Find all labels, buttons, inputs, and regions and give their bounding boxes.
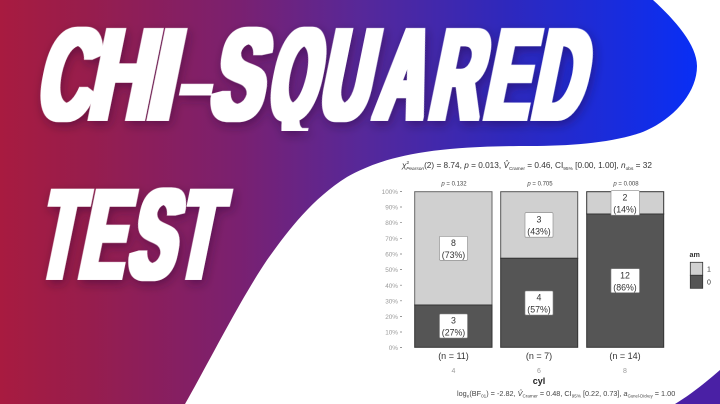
- title: CHI-SQUARED: H: [80, 2, 171, 147]
- stacked bar chart: [382, 182, 664, 386]
- data labels: (57%): [527, 304, 551, 314]
- title: CHI-SQUARED: A: [367, 2, 445, 147]
- y axis labels: 70%: [385, 236, 398, 243]
- chart caption: ) = -2.82,: [486, 389, 518, 398]
- data labels: (86%): [613, 282, 637, 292]
- y axis labels: 10%: [385, 330, 398, 336]
- y axis labels: 80%: [385, 220, 398, 227]
- chart subtitle statistics: obs: [626, 166, 634, 172]
- x axis title: cyl: [533, 376, 545, 386]
- title: CHI-SQUARED: E: [477, 2, 550, 147]
- chart caption: log: [457, 389, 467, 398]
- p values: p = 0.132: [440, 182, 467, 188]
- y axis labels: 0%: [389, 345, 398, 352]
- chart caption: Cramer: [523, 394, 538, 398]
- chart subtitle statistics: p = 0.013, V̂: [464, 161, 509, 170]
- chart subtitle statistics: Cramer: [509, 166, 525, 172]
- y axis labels: [382, 189, 398, 352]
- chart subtitle statistics: = 32: [633, 161, 652, 170]
- legend title: am: [690, 250, 700, 259]
- y axis ticks: [400, 192, 402, 348]
- bar: cyl 6: [501, 192, 578, 347]
- chart caption: 01: [481, 394, 487, 398]
- y axis labels: 100%: [382, 189, 398, 196]
- chart subtitle statistics: Pearson: [406, 166, 424, 172]
- title: TEST: E: [72, 163, 145, 305]
- chart subtitle statistics: 2: [407, 160, 410, 166]
- y axis labels: 20%: [385, 314, 398, 321]
- y axis labels: 50%: [385, 267, 398, 274]
- data labels: 3: [451, 316, 456, 326]
- chart caption: 95%: [572, 394, 581, 398]
- bar: cyl 4: [415, 192, 492, 347]
- sample sizes: (n = 14): [609, 351, 641, 361]
- title: CHI-SQUARED: [37, 26, 601, 140]
- p values: p = 0.705: [526, 182, 553, 188]
- sample sizes: (n = 7): [526, 351, 552, 361]
- p values: p = 0.008: [612, 182, 639, 188]
- x axis categories: 4: [452, 368, 456, 375]
- chart caption: = 1.00: [653, 389, 675, 398]
- title: CHI-SQUARED: I: [138, 2, 196, 147]
- title: CHI-SQUARED: Q: [260, 2, 337, 147]
- chart caption: e: [467, 394, 470, 398]
- data labels: [440, 191, 640, 338]
- data labels: 8: [451, 238, 456, 248]
- title: CHI-SQUARED: -: [174, 49, 221, 121]
- chart caption: (BF: [469, 389, 482, 398]
- y axis labels: 40%: [385, 283, 398, 290]
- y axis labels: 30%: [385, 298, 398, 306]
- data labels: 12: [620, 270, 630, 280]
- data labels: 2: [623, 192, 628, 202]
- legend: 0: [707, 280, 711, 286]
- chart caption: a: [624, 389, 628, 398]
- sample sizes: (n = 11): [438, 351, 469, 361]
- legend: [690, 250, 711, 288]
- sample sizes: [438, 351, 641, 361]
- data labels: (73%): [442, 250, 465, 260]
- title: TEST: T: [31, 163, 96, 305]
- p values: [440, 182, 639, 188]
- title: CHI-SQUARED: S: [202, 2, 283, 147]
- title: TEST: S: [121, 163, 195, 305]
- chart subtitle statistics: 95%: [563, 166, 574, 172]
- legend: 1: [707, 266, 711, 274]
- chart subtitle statistics: (2) = 8.74,: [424, 161, 464, 170]
- data labels: 4: [537, 292, 542, 302]
- title: CHI-SQUARED: C: [29, 2, 112, 147]
- corner gradient shape: [675, 370, 720, 404]
- bar: cyl 8: [587, 192, 664, 347]
- data labels: (43%): [527, 226, 551, 236]
- chart caption: = 0.48, CI: [538, 389, 572, 398]
- chart subtitle statistics: [0.00, 1.00],: [573, 161, 621, 170]
- title: CHI-SQUARED: U: [312, 2, 390, 147]
- y axis labels: 90%: [385, 204, 398, 212]
- x axis categories: 6: [537, 368, 541, 375]
- title: TEST: T: [170, 163, 235, 305]
- chart caption: [0.22, 0.73],: [581, 389, 624, 398]
- title: CHI-SQUARED: R: [422, 2, 501, 147]
- y axis labels: 60%: [385, 252, 398, 258]
- chart subtitle statistics: χ: [401, 161, 407, 170]
- x axis categories: [452, 368, 627, 375]
- chart caption: Gunel-Dickey: [628, 394, 654, 398]
- title: CHI-SQUARED: D: [524, 2, 604, 147]
- chart subtitle statistics: n: [621, 161, 626, 170]
- data labels: (27%): [442, 328, 465, 338]
- title: TEST: [31, 163, 235, 305]
- x axis categories: 8: [623, 368, 627, 375]
- chart caption: V̂: [518, 389, 524, 398]
- data labels: (14%): [613, 204, 637, 214]
- chart subtitle statistics: = 0.46, CI: [525, 161, 563, 170]
- data labels: 3: [537, 214, 542, 224]
